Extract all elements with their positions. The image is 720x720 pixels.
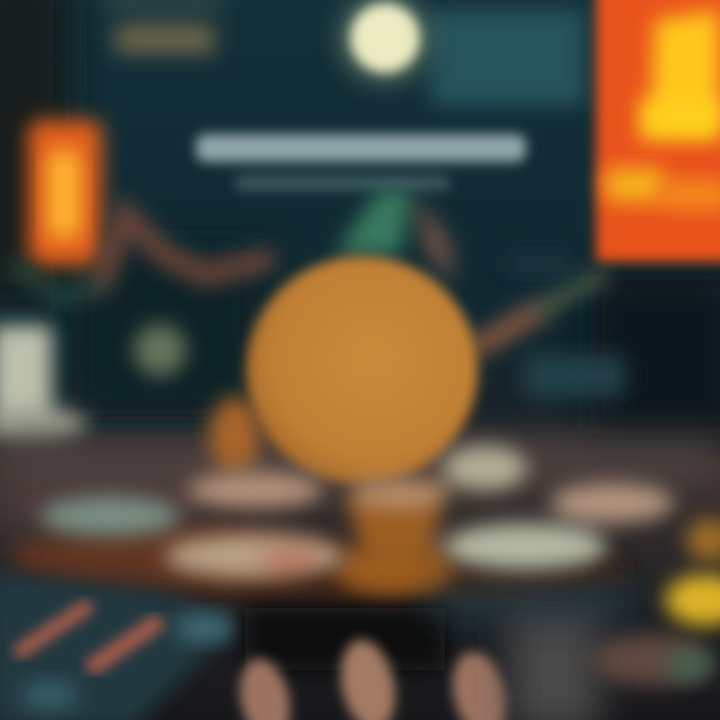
food pieces on plate bbox=[40, 446, 674, 578]
chart marker: small pale circle bbox=[134, 324, 186, 376]
faint text: right side bbox=[505, 255, 625, 397]
table surface: bottom-right bbox=[430, 590, 630, 720]
coin bbox=[209, 256, 478, 484]
plate bbox=[10, 525, 630, 604]
blurred heading bbox=[196, 134, 526, 190]
screen panel: top teal area bbox=[430, 10, 585, 105]
chart line: left red trend bbox=[15, 215, 265, 300]
icon: glowing bulb bbox=[335, 0, 435, 88]
icon: white cup left bbox=[0, 325, 87, 443]
neon panel: left orange bbox=[28, 120, 102, 266]
top-left sign bbox=[105, 0, 225, 54]
neon panel: right orange bbox=[596, 0, 720, 262]
hand: dark palm and fingers bbox=[233, 608, 516, 720]
food: right foreground bbox=[592, 518, 720, 686]
card: bottom-left bbox=[0, 572, 240, 720]
table band bbox=[0, 440, 720, 530]
arrow: green tip above coin bbox=[335, 190, 455, 285]
chart line: right branch bbox=[480, 275, 600, 345]
